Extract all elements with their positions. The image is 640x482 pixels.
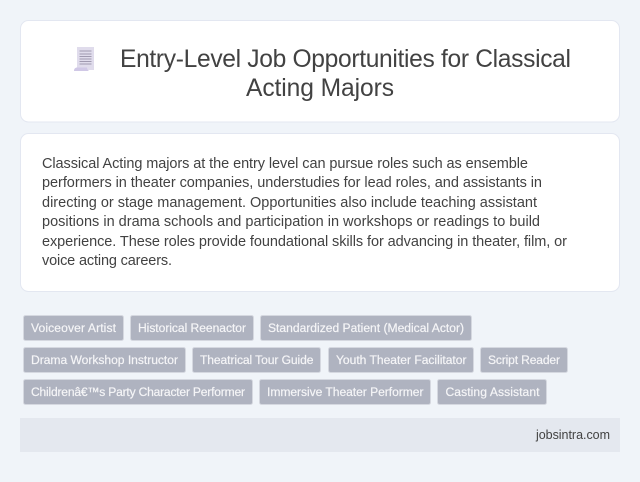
title text: Acting Majors [246, 75, 394, 102]
tag: Youth Theater Facilitator [328, 348, 474, 372]
footer source text: jobsintra.com [535, 428, 610, 442]
footer [20, 418, 620, 452]
description text: positions in drama schools and participation in workshops or readings to build [42, 214, 540, 230]
tag: Immersive Theater Performer: Immersive Theater Performer [267, 385, 424, 399]
description text: directing or stage management. Opportunities also include teaching assistant [42, 195, 537, 211]
description text: experience. These roles provide foundational skills for advancing in theater, film, or [42, 234, 567, 250]
tag: Script Reader [480, 348, 568, 372]
icon: scroll document [74, 47, 94, 71]
description text [42, 156, 567, 269]
tag: Voiceover Artist [24, 316, 124, 340]
tag: Theatrical Tour Guide: Theatrical Tour Guide [200, 353, 314, 367]
tag: Casting Assistant [438, 380, 546, 404]
tag: Standardized Patient: Standardized Patient (Medical Actor) [268, 321, 464, 335]
description text: Classical Acting majors at the entry level can pursue roles such as ensemble [42, 156, 528, 172]
description text: voice acting careers. [42, 253, 172, 269]
tag: Children's Party Character Performer: Childrenâ€™s Party Character Performer [31, 385, 245, 399]
description panel [20, 134, 620, 292]
tag: Historical Reenactor: Historical Reenactor [138, 321, 246, 335]
description text: performers in theater companies, understudies for lead roles, and assistants in [42, 175, 542, 191]
tag: Standardized Patient [260, 316, 472, 340]
tag: Historical Reenactor [130, 316, 254, 340]
tag: Drama Workshop Instructor [24, 348, 186, 372]
tags [24, 316, 568, 404]
tag: Youth Theater Facilitator: Youth Theater Facilitator [336, 353, 466, 367]
tag: Voiceover Artist: Voiceover Artist [31, 321, 117, 335]
title text: Entry-Level Job Opportunities for Classical [120, 46, 571, 73]
tag: Script Reader: Script Reader [488, 353, 560, 367]
tag: Children's Party Character Performer [24, 380, 252, 404]
title text [120, 46, 571, 102]
tag: Immersive Theater Performer [260, 380, 430, 404]
tag: Drama Workshop Instructor: Drama Workshop Instructor [31, 353, 178, 367]
tag: Casting Assistant: Casting Assistant [446, 385, 540, 399]
tag: Theatrical Tour Guide [192, 348, 320, 372]
title panel [20, 20, 620, 122]
